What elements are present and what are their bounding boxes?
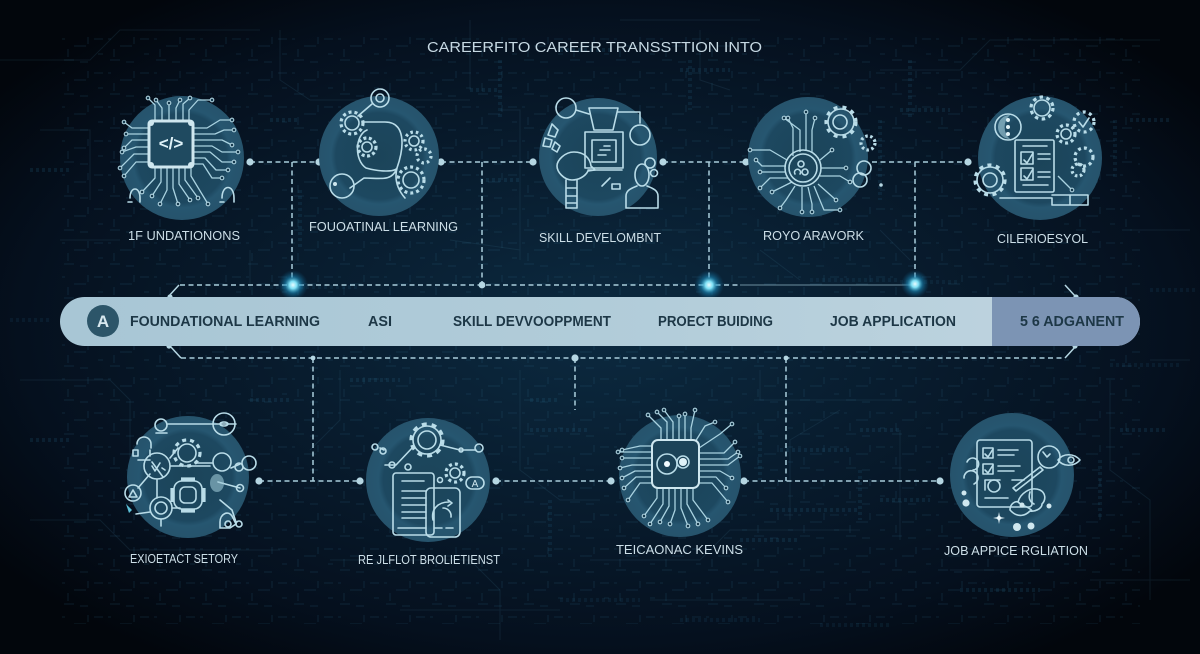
panel: skill development icon	[539, 98, 658, 216]
panel: portfolio documents icon	[366, 418, 490, 542]
title: CAREERFITO CAREER TRANSSTTION INTO	[427, 40, 762, 56]
stage labels: JOB APPLICATION	[830, 314, 956, 330]
glowing nodes	[278, 270, 929, 300]
icon labels: JOB APPICE RGLIATION	[944, 544, 1088, 558]
icon labels: RE JLFLOT BROLIETIENST	[358, 553, 500, 567]
icon labels: 1F UNDATIONONS	[128, 229, 240, 243]
panel: checklist icon	[975, 96, 1102, 220]
panel: foundational learning icon	[319, 89, 439, 216]
letter A tag: A	[472, 479, 479, 490]
badge A: A	[97, 312, 109, 331]
icon labels: TEICAONAC KEVINS	[616, 543, 743, 557]
stage labels: PROECT BUIDING	[658, 314, 773, 330]
stage labels: 5 6 ADGANENT	[1020, 314, 1124, 330]
stage labels: FOUNDATIONAL LEARNING	[130, 314, 320, 330]
stage labels	[130, 314, 1124, 330]
panel: foundations icon	[120, 96, 244, 220]
icon labels: FOUOATINAL LEARNING	[309, 220, 458, 234]
icon labels: EXIOETACT SETORY	[130, 552, 239, 566]
connectors: bottom row	[166, 294, 1079, 485]
connectors: top row	[168, 158, 1076, 297]
panel: strategy network icon	[125, 413, 256, 538]
panel: technical review chip icon	[618, 410, 741, 537]
stage labels: SKILL DEVVOOPPMENT	[453, 314, 611, 330]
badge A	[87, 305, 119, 337]
stage labels: ASI	[368, 314, 392, 330]
panel: network icon	[748, 97, 883, 217]
code symbol: </>	[159, 134, 183, 153]
timeline bar	[60, 297, 1140, 346]
icon labels: SKILL DEVELOMBNT	[539, 231, 661, 245]
icon labels: CILERIOESYOL	[997, 232, 1088, 246]
icon labels	[128, 220, 1088, 567]
final stage segment	[992, 297, 1140, 346]
icon labels: ROYO ARAVORK	[763, 229, 865, 243]
panel: job application icon	[950, 413, 1080, 537]
